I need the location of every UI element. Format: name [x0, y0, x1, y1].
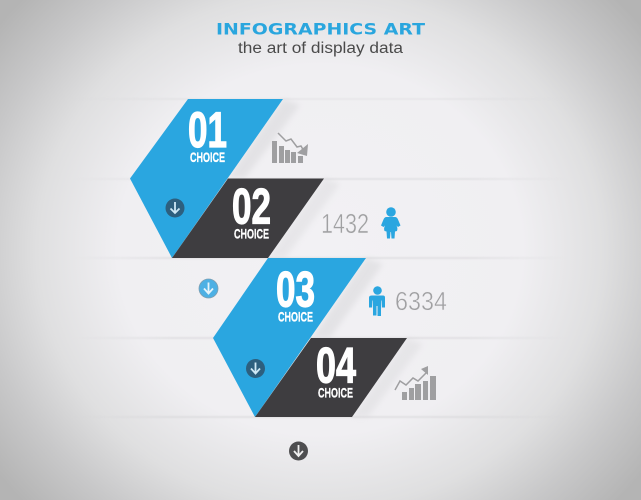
label choice 02: CHOICE: [234, 226, 269, 242]
number 01: 01: [188, 102, 227, 158]
panel: choice 04: [255, 338, 407, 417]
value 6334: 6334: [395, 286, 447, 316]
panel: choice 03: [213, 258, 366, 417]
number 03: 03: [276, 262, 315, 318]
label choice 04: CHOICE: [318, 386, 353, 400]
title: INFOGRAPHICS ART: [216, 20, 425, 38]
icon: falling bar chart: [272, 133, 308, 163]
icon: arrow button on choice 01: [166, 198, 184, 218]
number 02: 02: [232, 178, 271, 234]
icon: female figure: [381, 207, 400, 238]
icon: rising bar chart: [395, 366, 436, 400]
icon: arrow button between choices: [199, 279, 218, 298]
number 04: 04: [316, 338, 356, 394]
panel: choice 02: [172, 178, 324, 258]
icon: arrow button at bottom: [289, 442, 308, 460]
value 1432: 1432: [321, 208, 369, 239]
panel: choice 01: [130, 99, 283, 258]
icon: male figure: [369, 286, 385, 316]
label choice 03: CHOICE: [278, 310, 313, 324]
icon: arrow button on choice 03: [246, 359, 265, 378]
subtitle: the art of display data: [238, 40, 403, 57]
label choice 01: CHOICE: [190, 150, 225, 165]
